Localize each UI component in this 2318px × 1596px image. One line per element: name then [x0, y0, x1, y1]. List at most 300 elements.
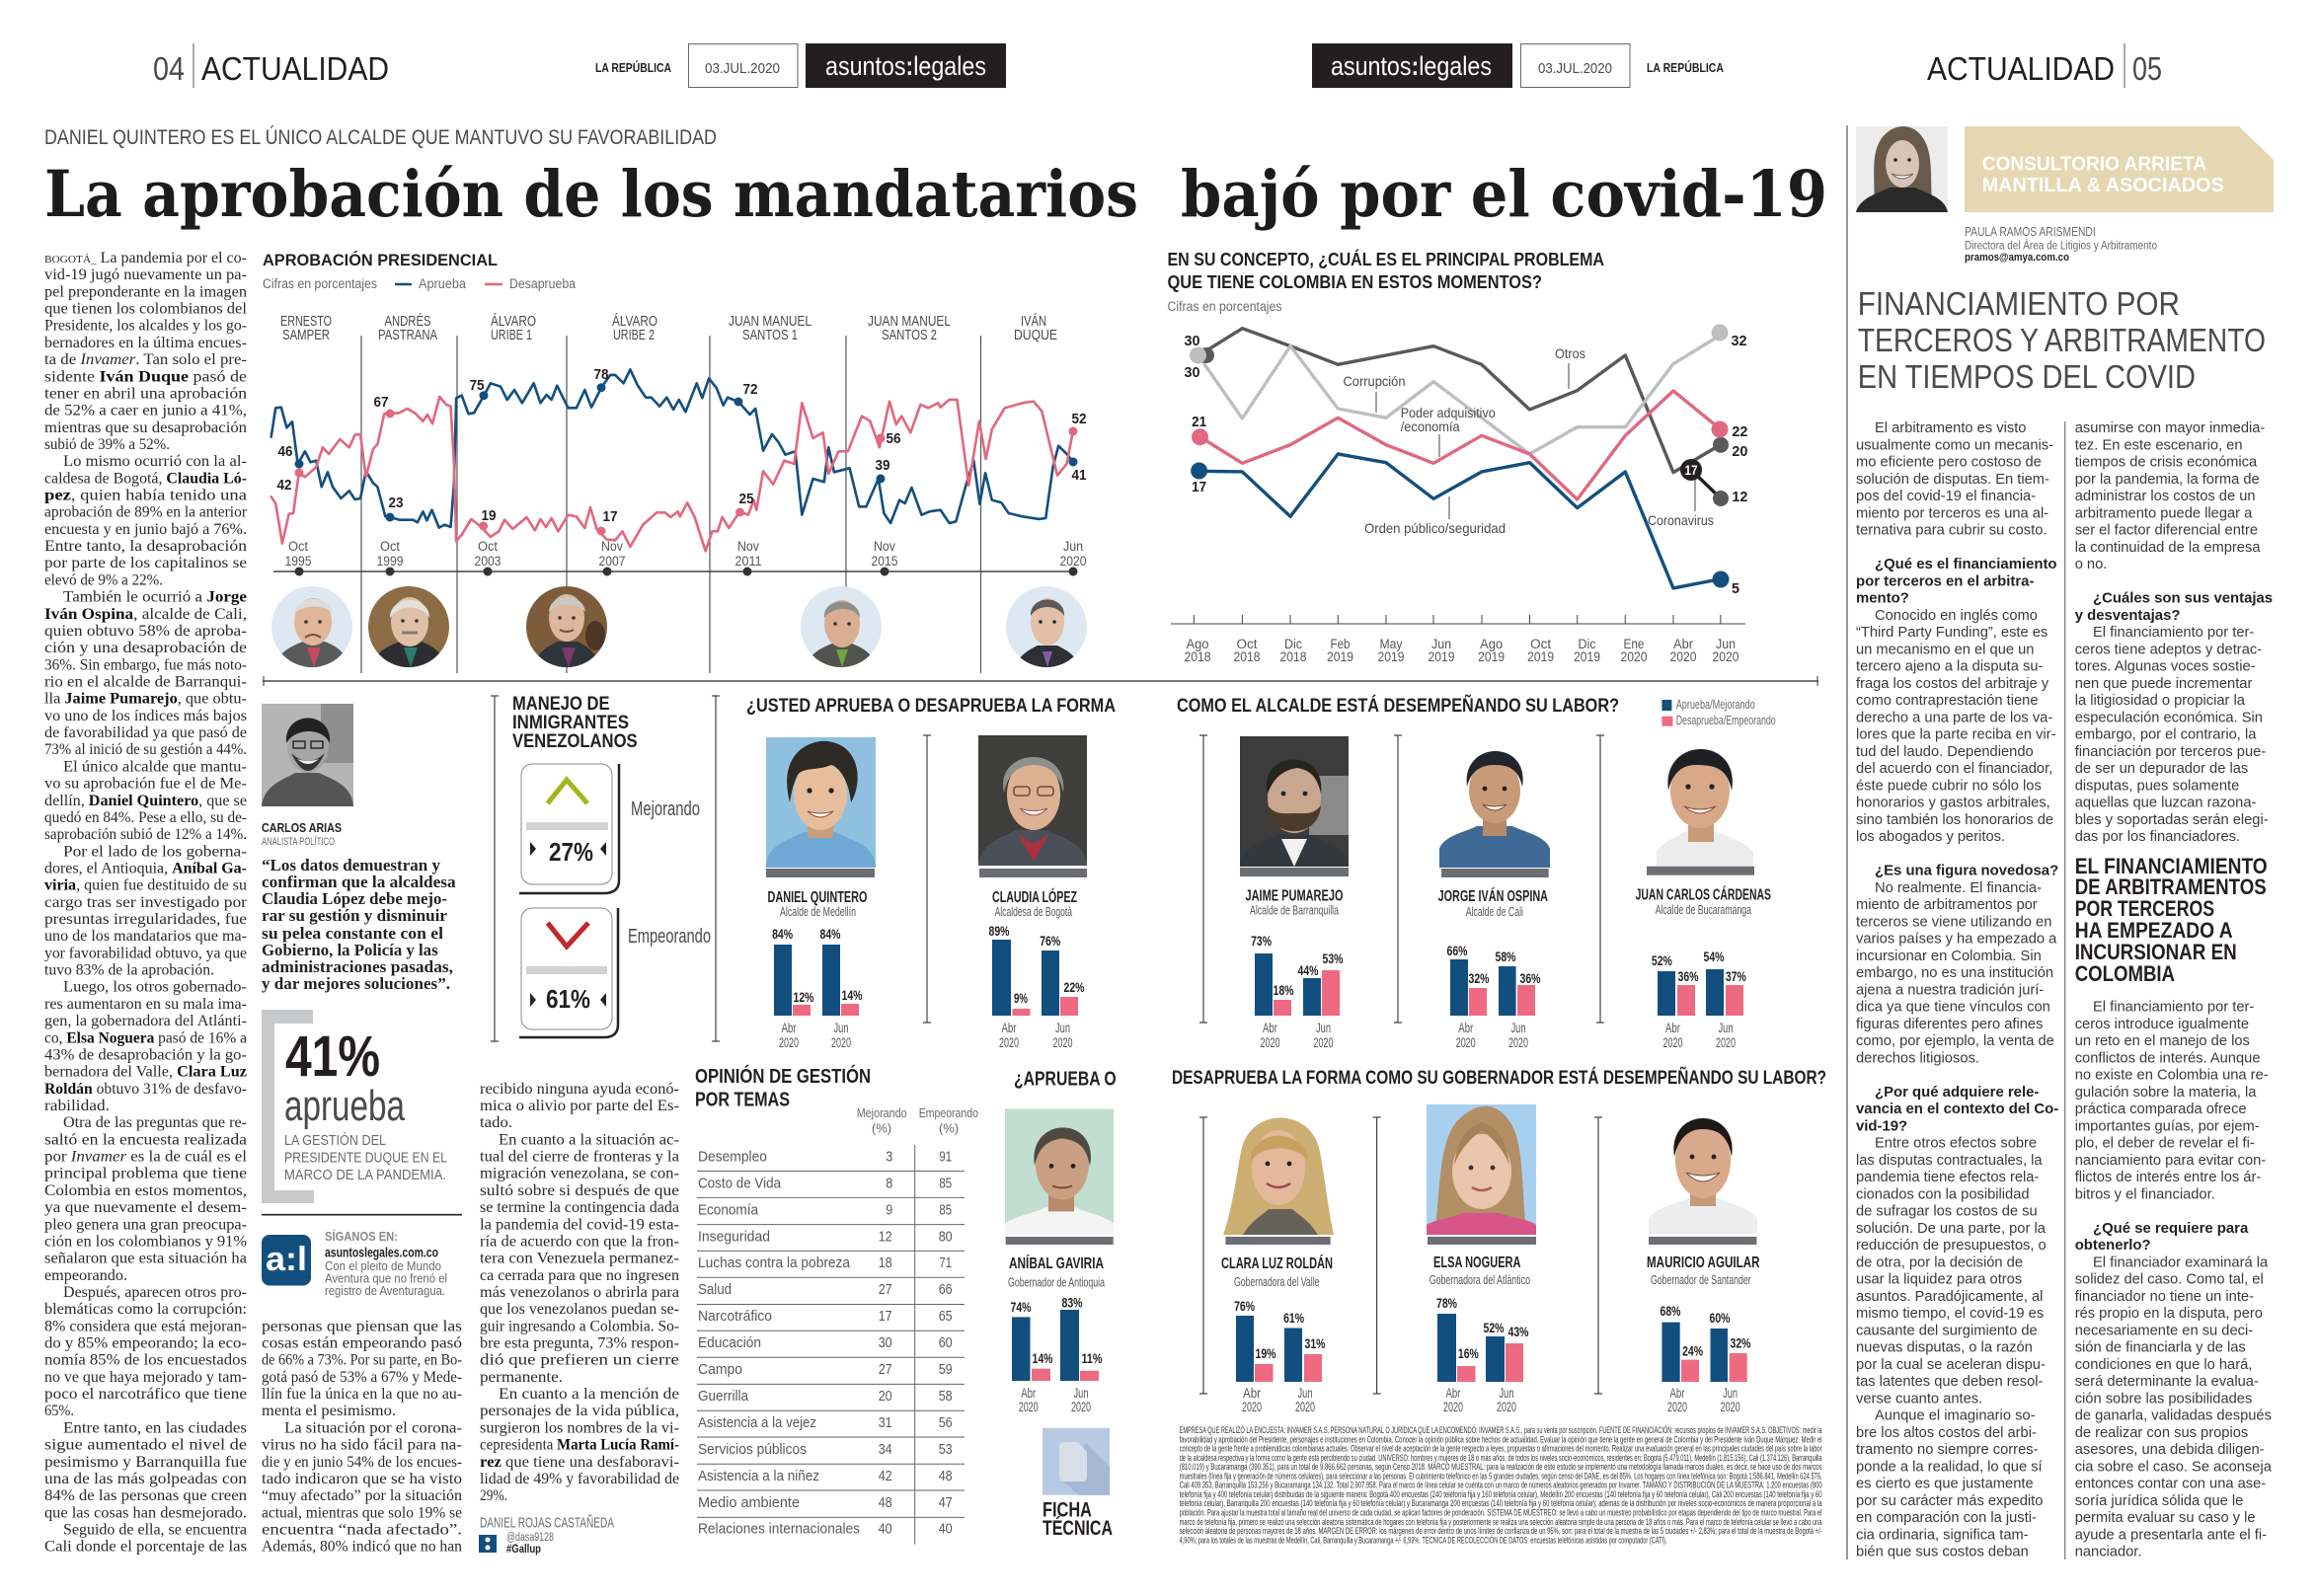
- opinion column B: será determinante la evalua-: [2075, 1374, 2259, 1390]
- president names: SANTOS 2: [882, 328, 937, 343]
- title: [44, 157, 1827, 232]
- opinion column B: administrar los costos de un: [2075, 489, 2256, 504]
- bar chart: 52%: [1483, 1320, 1505, 1335]
- article column 1: res aumentaron en su mala ima-: [44, 996, 247, 1013]
- card: empeorando: 61%: [546, 984, 590, 1014]
- panel: Elsa Noguera: ELSA NOGUERA: [1433, 1254, 1521, 1271]
- chart values: [276, 366, 1086, 525]
- president names: ERNESTO: [280, 314, 332, 330]
- article column 1: ya que nuevamente el desem-: [44, 1199, 247, 1216]
- chart values: 42: [276, 477, 292, 494]
- bar chart: 76%: [1040, 933, 1061, 949]
- bar chart: 14%: [1033, 1350, 1053, 1366]
- opinion column A: del acuerdo con el financiador,: [1856, 761, 2052, 777]
- bar chart: 2020: [1508, 1035, 1528, 1050]
- series annotations: [1343, 345, 1714, 536]
- opinion column A: ¿Es una figura novedosa?: [1875, 863, 2058, 878]
- opinion column B: ¿Qué se requiere para: [2093, 1221, 2249, 1237]
- article column 3: la pandemia del covid-19 esta-: [480, 1216, 679, 1233]
- chart values: 12: [1732, 489, 1747, 505]
- technical sheet text: (810.019) y Bucaramanga (390.351), para un total de 9.866.662 personas, según Censo 2018. MARCO MUESTRAL: para la realización de este estudio se implementó una metodología llamada marcos duales, es decir, se hace uso de dos marcos: [1180, 1462, 1822, 1472]
- table rows: 12: [879, 1229, 892, 1245]
- table rows: 60: [939, 1335, 953, 1351]
- article column 1: cargo tras ser investigado por: [44, 894, 248, 911]
- callout: 41% aprueba: aprueba: [284, 1082, 405, 1130]
- article column 1: subió de 39% a 52%.: [44, 436, 170, 453]
- portrait: Pastrana: [368, 586, 449, 667]
- opinion column B: financiador no tiene un inte-: [2075, 1289, 2254, 1305]
- article column 1: quedó en 84%. Pese a ello, su de-: [44, 809, 247, 826]
- panel: Clara Luz Roldán: CLARA LUZ ROLDÁN: [1221, 1254, 1333, 1272]
- bar chart: 2020: [1242, 1400, 1262, 1414]
- opinion column A: bre los altos costos del arbi-: [1856, 1425, 2037, 1441]
- opinion column A: mento?: [1856, 590, 1909, 606]
- technical sheet text: EMPRESA QUE REALIZÓ LA ENCUESTA: INVAMER S.A.S. PERSONA NATURAL O JURÍDICA QUE LA ENCOMENDÓ: INVAMER S.A.S., para su venta por suscripción. FUENTE DE FINANCIACIÓN: recursos propios de INVAMER S.A.S. OBJETIVOS: medir la: [1180, 1425, 1822, 1435]
- heading: [512, 694, 638, 752]
- bar chart: 78%: [1436, 1295, 1457, 1311]
- opinion column B: sión de financiarla y de las: [2075, 1340, 2246, 1356]
- opinion column B: bitros y el financiador.: [2075, 1186, 2215, 1202]
- bar chart: 58%: [1495, 949, 1516, 964]
- opinion column B: asesores, una debida diligen-: [2075, 1442, 2265, 1458]
- technical sheet text: de la alcaldesa respectiva y la forma como la gente está percibiendo su ciudad. UNIVERSO: hombres y mujeres de 18 o más años, de todos los niveles socio-económicos, residentes en: Bogotá (5.479.011), Medellín (1.815.156), Cali (1.374.126), Barranquilla: [1180, 1453, 1822, 1463]
- quote: rar su gestión y disminuir: [262, 906, 447, 925]
- promo: asuntos legales: [262, 1215, 462, 1298]
- photo: Juan Carlos Cárdenas: [1657, 749, 1753, 866]
- timeline: 2003: [474, 554, 502, 569]
- technical sheet text: telefonía fija y 400 telefonía celular) distribuidas de la siguiente manera: Bogotá 400 encuestas (240 telefonía fija y 160 telefonía celular), Medellín 200 encuestas (140 telefonía fija y 60 telefonía celular), Cali 200 encuestas (140 telefonía fija y 60: [1180, 1489, 1822, 1499]
- timeline: Nov: [737, 539, 759, 554]
- table rows: Desempleo: [698, 1148, 767, 1165]
- opinion column A: [1856, 420, 2058, 1559]
- byline: #Gallup: [506, 1544, 541, 1556]
- opinion column B: disputas, pues solamente: [2075, 778, 2239, 794]
- chart values: 23: [389, 494, 403, 511]
- opinion column B: un reto en el manejo de los: [2075, 1033, 2250, 1049]
- bar chart: 2020: [1456, 1035, 1476, 1050]
- opinion column A: ajena a nuestra tradición jurí-: [1856, 982, 2044, 998]
- panel separators: alcaldes: [923, 735, 1604, 1023]
- table rows: 31: [879, 1415, 892, 1431]
- article column 1: pez , quien había tenido una: [44, 488, 247, 503]
- article column 3: sultó sobre si después de que: [480, 1182, 679, 1199]
- opinion column A: ponde a la realidad, lo que sí: [1856, 1459, 2044, 1475]
- banner: MANTILLA & ASOCIADOS: [1982, 175, 2224, 196]
- article column 1: Por el lado de los goberna-: [63, 843, 247, 860]
- opinion column A: usualmente como un mecanis-: [1856, 437, 2053, 453]
- opinion column A: Entre otros efectos sobre: [1875, 1135, 2037, 1151]
- table rows: Asistencia a la niñez: [698, 1468, 819, 1484]
- table heading: POR TEMAS: [695, 1090, 790, 1111]
- table heading: OPINIÓN DE GESTIÓN: [695, 1064, 871, 1088]
- bar chart: 53%: [1323, 950, 1344, 966]
- axis: 2019: [1327, 649, 1353, 664]
- article column 1: bernadores en la última encues-: [44, 335, 247, 351]
- article column 3: migración venezolana, se con-: [480, 1166, 679, 1182]
- article column 3: rez que tiene una desfaboravi-: [480, 1454, 679, 1471]
- article column 1: lla Jaime Pumarejo , que obtu-: [44, 691, 247, 708]
- axis: 2019: [1574, 649, 1600, 664]
- chart values: 46: [278, 443, 292, 460]
- opinion column A: fraga los costos del arbitraje y: [1856, 676, 2049, 692]
- heading: MANEJO DE: [512, 694, 610, 715]
- opinion column A: tramento no siempre corres-: [1856, 1442, 2039, 1458]
- opinion column A: sino también los honorarios de: [1856, 812, 2053, 828]
- chart values: 25: [738, 491, 754, 507]
- article column 2: tado indicaron que se ha visto: [262, 1471, 462, 1487]
- timeline: [273, 539, 1086, 576]
- timeline: 2007: [598, 554, 626, 569]
- article column 1: ta de Invamer . Tan solo el pre-: [44, 351, 247, 368]
- chart values: 41: [1072, 467, 1086, 484]
- callout: 41% aprueba: PRESIDENTE DUQUE EN EL: [284, 1151, 447, 1167]
- article column 3: se termine la contingencia dada: [480, 1199, 679, 1216]
- quote: administraciones pasadas,: [262, 957, 453, 976]
- article column 2: virus no ha sido fácil para na-: [262, 1437, 462, 1454]
- analyst panel: Carlos Arias: ANALISTA POLÍTICO: [262, 835, 335, 848]
- president names: DUQUE: [1014, 328, 1057, 343]
- opinion column A: nuevas disputas, o la razón: [1856, 1340, 2033, 1356]
- chart values: 30: [1185, 333, 1200, 349]
- table rows: 18: [879, 1255, 892, 1271]
- chart values: 20: [1732, 443, 1747, 460]
- bar chart: Jun: [1723, 1386, 1738, 1401]
- opinion column A: miento de arbitramentos por: [1856, 897, 2038, 913]
- article column 1: poco el narcotráfico que tiene: [44, 1386, 247, 1403]
- table rows: Narcotráfico: [698, 1308, 772, 1325]
- opinion column A: tud del laudo. Dependiendo: [1856, 744, 2034, 760]
- heading: INMIGRANTES: [512, 713, 629, 733]
- left page header: [153, 43, 1006, 88]
- article column 1: pleo genera una gran preocupa-: [44, 1216, 247, 1233]
- opinion column B: de ser un depurador de las: [2075, 761, 2248, 777]
- right page header: 05: [2132, 50, 2162, 87]
- table heading: [695, 1064, 978, 1135]
- article column 1: co, Elsa Noguera pasó de 16% a: [44, 1029, 247, 1046]
- opinion title: FINANCIAMIENTO POR: [1858, 285, 2180, 322]
- opinion column B: aquellas que luzcan razona-: [2075, 796, 2257, 811]
- article column 3: ca cerrada para que no ingresen: [480, 1267, 679, 1284]
- legend: Aprueba: [419, 276, 466, 291]
- timeline: Oct: [380, 539, 400, 554]
- axis: 2018: [1185, 649, 1210, 664]
- opinion column A: verse cuanto antes.: [1856, 1391, 1982, 1406]
- bar chart: 2020: [779, 1035, 799, 1050]
- card: empeorando: [519, 908, 711, 1037]
- table rows: 80: [939, 1229, 953, 1245]
- opinion column A: solución. De una parte, por la: [1856, 1221, 2047, 1237]
- card: mejorando: Mejorando: [631, 798, 700, 820]
- article column 2: personas que piensan que las: [262, 1318, 462, 1334]
- technical sheet text: muestrales (línea fija y generación de números celulares), para seleccionar a las personas. El cubrimiento telefónico en las 5 grandes ciudades, según censo del DANE, es del 85%. Los hogares con línea telefónica son: Bogotá 1.586.841, Medellín 624.576,: [1180, 1471, 1822, 1481]
- heading: alcaldes: [746, 695, 1619, 717]
- article column 1: señalaron que esta situación ha: [44, 1251, 247, 1267]
- opinion column A: terceros se viene utilizando en: [1856, 914, 2051, 930]
- table rows: Campo: [698, 1361, 742, 1378]
- article column 1: aprobación de 89% en la anterior: [44, 504, 248, 521]
- opinion column A: mismo tiempo, el covid-19 es: [1856, 1306, 2044, 1322]
- opinion column A: las disputas contractuales, la: [1856, 1153, 2043, 1169]
- article column 1: 43% de desaprobación y la go-: [44, 1046, 247, 1064]
- opinion column B: El financiamiento por ter-: [2093, 625, 2254, 641]
- article column 1: saltó en la encuesta realizada: [44, 1131, 247, 1148]
- bar chart: 76%: [1234, 1298, 1256, 1314]
- panel: Clara Luz Roldán: Gobernadora del Valle: [1234, 1275, 1320, 1289]
- axis: Ago: [1187, 637, 1208, 651]
- axis: 2018: [1279, 649, 1307, 664]
- article column 1: saprobación subió de 12% a 14%.: [44, 826, 247, 843]
- axis: Oct: [1236, 637, 1258, 651]
- president names: JUAN MANUEL: [868, 314, 951, 330]
- technical sheet text: 4,90%; para los totales de las muestras de Medellín, Cali, Barranquilla y Bucaramanga +/- 6,93%. TÉCNICA DE RECOLECCIÓN DE DATOS: encuestas telefónicas asistidas por computador (CATI).: [1180, 1535, 1667, 1545]
- opinion column B: flictos de interés entre los ár-: [2075, 1170, 2261, 1185]
- analyst panel: Carlos Arias: [262, 704, 456, 993]
- table rows: 85: [939, 1202, 952, 1218]
- article column 3: permanente.: [480, 1369, 563, 1386]
- timeline: 1995: [284, 554, 312, 569]
- photo: Jorge Iván Ospina: [1439, 751, 1550, 868]
- chart values: [1185, 333, 1747, 597]
- article column 3: mica o alivio por parte del Es-: [480, 1098, 679, 1114]
- axis: Dic: [1284, 637, 1302, 651]
- bar chart: Jun: [1510, 1021, 1526, 1035]
- opinion column A: un mecanismo en el que un: [1856, 642, 2034, 657]
- line: corrupción: [1198, 336, 1720, 454]
- table rows: 91: [939, 1149, 952, 1165]
- icon: ficha técnica: [1043, 1428, 1113, 1540]
- article column 1: [44, 250, 248, 1556]
- panel: Elsa Noguera: Gobernadora del Atlántico: [1429, 1273, 1530, 1287]
- quote: su pelea constante con el: [262, 924, 443, 943]
- technical sheet text: población. Para ajustar la muestra total al tamaño real del universo de cada ciudad, se aplican factores de ponderación. SISTEMA DE MUESTREO: se llevó a cabo un muestreo probabilístico por etapas dependiendo del tipo de marco muestral. Para el: [1180, 1508, 1822, 1518]
- president names: ANDRÉS: [385, 313, 430, 330]
- title: bajó por el covid-19: [1181, 157, 1827, 232]
- article column 3: tera con Venezuela permanez-: [480, 1251, 679, 1267]
- bar chart: Jun: [833, 1021, 849, 1035]
- table rows: [698, 1148, 953, 1538]
- photo: Carlos Arias: [262, 704, 353, 806]
- table rows: Salud: [698, 1281, 732, 1298]
- pull quote: DE ARBITRAMENTOS: [2075, 874, 2267, 899]
- portrait: Santos: [801, 586, 882, 667]
- opinion column A: derechos litigiosos.: [1856, 1050, 1979, 1066]
- heading: alcaldes: COMO EL ALCALDE ESTÁ DESEMPEÑANDO SU LABOR?: [1177, 695, 1619, 717]
- opinion column B: ayude a presentarla ante el fi-: [2075, 1527, 2267, 1543]
- main horizontal divider: [263, 676, 1818, 686]
- president names: SAMPER: [282, 328, 330, 343]
- pull quote: [2075, 854, 2268, 986]
- article column 2: cosas están empeorando pasó: [262, 1334, 462, 1352]
- table: opinión de gestión por temas: [695, 1064, 978, 1545]
- technical sheet text: concepto de la gente frente a problemáticas colombianas actuales. Observar el nivel de aceptación de la gente respecto a leyes, propuestas o afirmaciones del momento. Realizar una evaluación general en las principales ciudades del país sobre la labor: [1180, 1444, 1822, 1454]
- article column 1: ción en los colombianos y 91%: [44, 1233, 247, 1250]
- article column 3: ría de acuerdo con que la fron-: [480, 1233, 679, 1250]
- chart: aprobación presidencial: [263, 251, 1087, 673]
- opinion title: EN TIEMPOS DEL COVID: [1858, 358, 2196, 395]
- president names: URIBE 1: [491, 328, 532, 343]
- bar chart: [1447, 943, 1541, 1050]
- chart markers: [294, 383, 1078, 535]
- article column 1: Presidente, los alcaldes y los go-: [44, 318, 247, 335]
- article column 3: lidad de 49% y favorabilidad de: [480, 1471, 679, 1487]
- table rows: Inseguridad: [698, 1228, 770, 1245]
- article column 1: mientras que su desaprobación: [44, 419, 247, 436]
- opinion column A: miento por terceros es una al-: [1856, 505, 2048, 521]
- table rows: Guerrilla: [698, 1388, 749, 1405]
- president names: URIBE 2: [613, 328, 655, 343]
- opinion column B: no existe en Colombia una re-: [2075, 1068, 2269, 1084]
- bar chart: [1661, 1303, 1751, 1414]
- legend: Aprueba/Mejorando: [1676, 697, 1755, 712]
- bar chart: [1011, 1295, 1103, 1414]
- pull quote: INCURSIONAR EN: [2075, 940, 2237, 964]
- portrait: Samper: [271, 586, 352, 667]
- chart values: 72: [742, 381, 758, 398]
- table rows: 17: [879, 1309, 892, 1325]
- opinion column B: [2075, 420, 2273, 1559]
- article column 1: Roldán obtuvo 31% de desfavo-: [44, 1081, 247, 1098]
- author: pramos@amya.com.co: [1965, 252, 2069, 264]
- opinion column B: financiación por terceros pue-: [2075, 744, 2266, 760]
- photo: Jaime Pumarejo: [1240, 736, 1349, 867]
- president names: PASTRANA: [378, 328, 437, 343]
- opinion column A: varios países y ha empezado a: [1856, 932, 2057, 948]
- bar chart: Abr: [1670, 1386, 1685, 1401]
- article column 3: más venezolanos o abrirla para: [480, 1284, 679, 1301]
- table rows: 20: [879, 1389, 892, 1405]
- bar chart: Jun: [1297, 1386, 1313, 1401]
- opinion column B: de realizar con sus propios: [2075, 1425, 2248, 1441]
- table rows: 27: [879, 1362, 892, 1378]
- bar chart: Abr: [1263, 1021, 1277, 1035]
- opinion column B: ceros introduce igualmente: [2075, 1017, 2249, 1032]
- bar chart: 32%: [1730, 1334, 1751, 1350]
- callout: 41% aprueba: 41%: [285, 1025, 380, 1089]
- article column 3: tado.: [480, 1114, 512, 1131]
- opinion column B: práctica comparada ofrece: [2075, 1102, 2247, 1117]
- opinion column B: arbitramento puede llegar a: [2075, 505, 2253, 521]
- table rows: 9: [886, 1202, 892, 1218]
- legend: Desaprueba/Empeorando: [1676, 713, 1776, 727]
- table rows: 40: [939, 1522, 953, 1538]
- table rows: 34: [879, 1442, 892, 1458]
- opinion column B: bles y soportadas serán elegi-: [2075, 812, 2269, 828]
- chart markers: [1190, 324, 1730, 588]
- article column 3: 29%.: [480, 1487, 507, 1504]
- promo: asuntos legales: asuntoslegales.com.co: [325, 1244, 438, 1259]
- article column 1: 36%. Sin embargo, fue más noto-: [44, 656, 247, 673]
- opinion column A: en comparación con la justi-: [1856, 1510, 2037, 1526]
- panel: Claudia López: [978, 735, 1087, 1050]
- line: orden público: [1199, 454, 1721, 588]
- technical sheet text: selección aleatoria de personas mayores de 18 años. MARGEN DE ERROR: los márgenes de error dentro de unos límites de confianza de un 95%, son: para el total de la muestra de las 5 ciudades +/- 2,83%; para el total de la muestra de Bogotá +/-: [1180, 1526, 1822, 1536]
- opinion column B: solidez del caso. Como tal, el: [2075, 1271, 2264, 1287]
- timeline: Jun: [1063, 539, 1083, 554]
- opinion column A: No realmente. El financia-: [1875, 880, 2042, 896]
- bar chart: 2020: [1443, 1400, 1463, 1414]
- icon: a:l logo: a:l: [266, 1241, 307, 1278]
- panel: Mauricio Aguilar: Gobernador de Santander: [1651, 1273, 1751, 1287]
- bar chart: 36%: [1520, 970, 1541, 986]
- table rows: 58: [939, 1389, 953, 1405]
- table rows: 30: [879, 1335, 892, 1351]
- opinion column B: embargo, por el contrario, la: [2075, 726, 2257, 742]
- panel: Juan Carlos Cárdenas: Alcalde de Bucaramanga: [1656, 903, 1751, 917]
- article column 1: dellín, Daniel Quintero, que se: [44, 793, 247, 809]
- quote: y dar mejores soluciones”.: [262, 974, 450, 993]
- line: poder adquisitivo: [1200, 391, 1721, 499]
- chart heading: APROBACIÓN PRESIDENCIAL: [263, 251, 498, 269]
- table rows: Asistencia a la vejez: [698, 1414, 816, 1431]
- right page header: 03.JUL.2020: [1538, 60, 1612, 77]
- opinion column B: tores. Algunas voces sostie-: [2075, 659, 2256, 675]
- opinion column A: pandemia tiene efectos rela-: [1856, 1170, 2039, 1185]
- series annotations: /economía: [1401, 418, 1460, 434]
- heading: gobernadores: DESAPRUEBA LA FORMA COMO SU GOBERNADOR ESTÁ DESEMPEÑANDO SU LABOR?: [1172, 1066, 1826, 1089]
- opinion column A: tercero ajeno a la disputa su-: [1856, 659, 2044, 675]
- panel: Mauricio Aguilar: MAURICIO AGUILAR: [1647, 1254, 1760, 1271]
- left page header: 03.JUL.2020: [705, 60, 780, 77]
- bar chart: 2020: [1019, 1400, 1039, 1414]
- opinion column B: obtenerlo?: [2075, 1238, 2151, 1254]
- article column 3: personajes de la vida pública,: [480, 1403, 679, 1419]
- article column 1: sigue aumentado el nivel de: [44, 1437, 247, 1454]
- table rows: Relaciones internacionales: [698, 1521, 860, 1538]
- opinion column A: embargo, no es una institución: [1856, 965, 2053, 981]
- opinion column A: tas latentes que deben resol-: [1856, 1374, 2044, 1390]
- article column 1: presuntas irregularidades, fue: [44, 911, 247, 928]
- opinion column B: ¿Cuáles son sus ventajas: [2093, 590, 2273, 606]
- opinion column B: por la pandemia, la forma de: [2075, 472, 2260, 488]
- technical sheet text: marco de telefonía fija, primero se realizó una selección aleatoria sistemática de hogares con telefonía fija y posteriormente se realiza una selección aleatoria simple de una persona de 18 años o más. Para el marco de telefonía celular se llevó a cabo una: [1180, 1517, 1822, 1527]
- promo: asuntos legales: SÍGANOS EN:: [325, 1229, 398, 1244]
- article column 2: llín fue la única en la que no au-: [262, 1386, 462, 1403]
- promo: asuntos legales: Con el pleito de Mundo: [325, 1259, 441, 1273]
- bar chart: 31%: [1305, 1335, 1326, 1351]
- table rows: 59: [939, 1362, 953, 1378]
- article column 1: rio en el alcalde de Barranqui-: [44, 673, 247, 691]
- title: La aprobación de los mandatarios: [44, 157, 1138, 232]
- table rows: 8: [886, 1176, 892, 1191]
- axis: May: [1380, 637, 1403, 651]
- technical sheet text: [1180, 1425, 1822, 1545]
- panel: Jorge Iván Ospina: Alcalde de Cali: [1466, 905, 1523, 919]
- legend: Cifras en porcentajes: [263, 276, 377, 291]
- panel: Juan Carlos Cárdenas: [1636, 749, 1771, 1050]
- article column 1: Lo mismo ocurrió con la al-: [63, 453, 247, 470]
- panel: Mauricio Aguilar: [1647, 1118, 1760, 1414]
- author: Directora del Área de Litigios y Arbitramento: [1965, 240, 2157, 253]
- heading: alcaldes: ¿USTED APRUEBA O DESAPRUEBA LA FORMA: [746, 696, 1116, 717]
- bar chart: 2020: [1295, 1400, 1315, 1414]
- opinion column A: figuras diferentes pero afines: [1856, 1017, 2043, 1032]
- chart heading: QUE TIENE COLOMBIA EN ESTOS MOMENTOS?: [1167, 272, 1542, 292]
- chart values: 52: [1072, 411, 1086, 427]
- pull quote: POR TERCEROS: [2075, 896, 2214, 921]
- opinion column B: rés propio en la disputa, pero: [2075, 1306, 2263, 1322]
- article column 1: viria, quien fue destituido de su: [44, 877, 247, 894]
- chart values: 75: [470, 377, 484, 394]
- author: [1965, 224, 2157, 264]
- article column 3: En cuanto a la mención de: [499, 1386, 679, 1403]
- article column 1: pesimismo y Barranquilla fue: [44, 1454, 247, 1471]
- series annotations: Coronavirus: [1648, 512, 1714, 528]
- chart values: 78: [594, 366, 608, 383]
- chart heading: EN SU CONCEPTO, ¿CUÁL ES EL PRINCIPAL PROBLEMA: [1167, 249, 1604, 269]
- photo: Elsa Noguera: [1427, 1104, 1536, 1235]
- table rows: Medio ambiente: [698, 1494, 800, 1511]
- bar chart: 18%: [1274, 982, 1294, 998]
